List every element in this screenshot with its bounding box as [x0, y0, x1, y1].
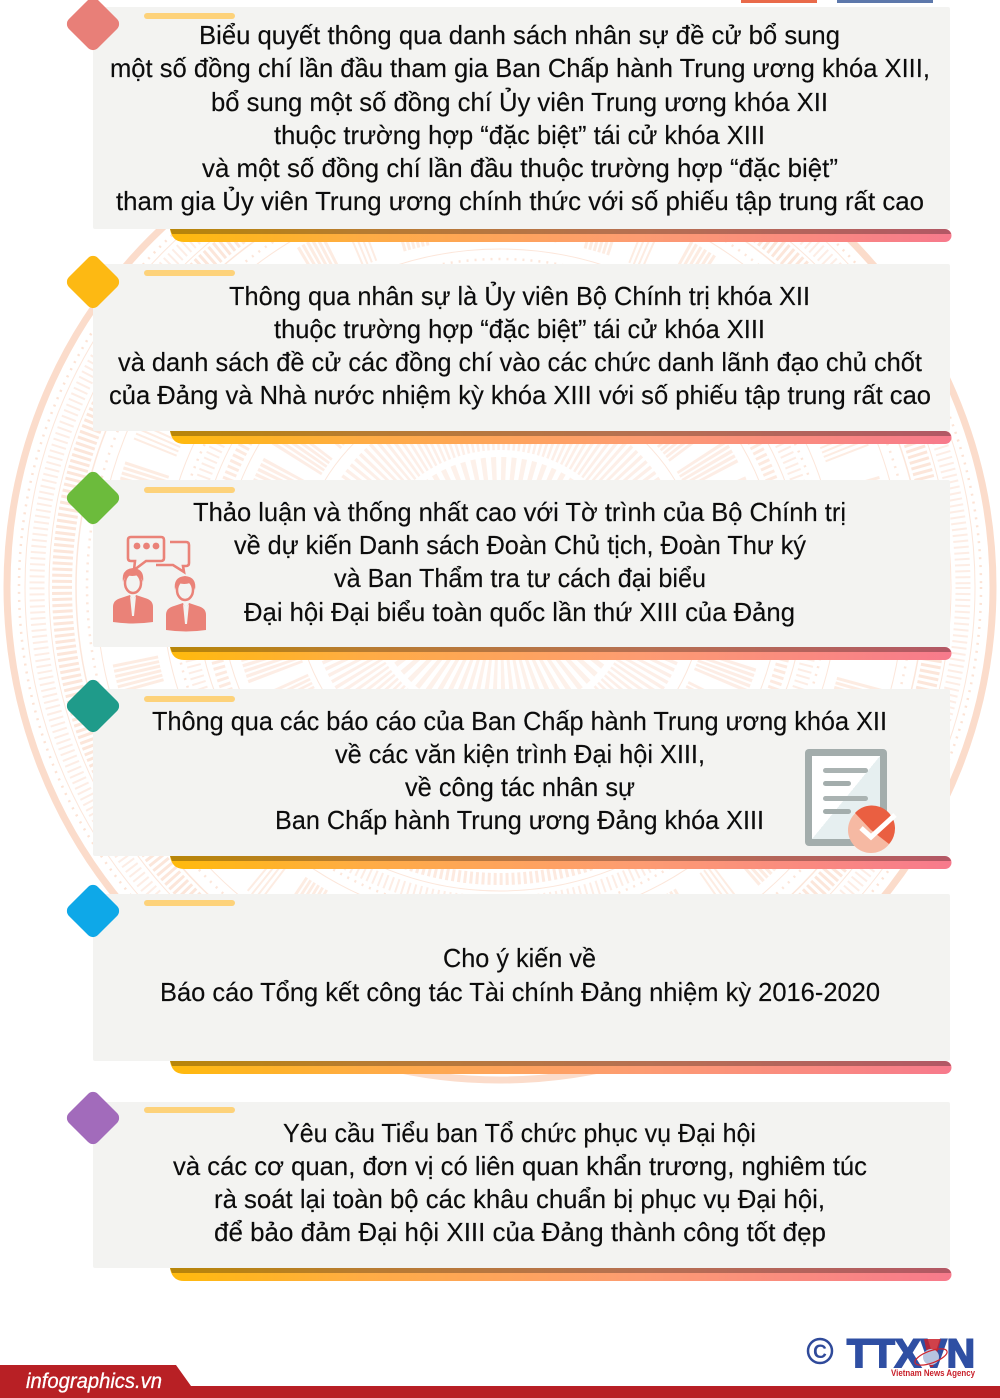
- text: panel 4: Thông qua các báo cáo của Ban Chấp hành Trung ương khóa XII: [152, 706, 887, 736]
- text: panel 5: Báo cáo Tổng kết công tác Tài chính Đảng nhiệm kỳ 2016-2020: [160, 977, 880, 1007]
- text: panel 1: bổ sung một số đồng chí Ủy viên Trung ương khóa XII: [211, 86, 828, 117]
- icon: yellow diamond marker: [64, 253, 122, 311]
- icon: teal diamond marker: [64, 677, 122, 735]
- text: panel 2: [109, 280, 931, 410]
- text: panel 3: Thảo luận và thống nhất cao với Tờ trình của Bộ Chính trị: [193, 497, 846, 527]
- text: panel 6: Yêu cầu Tiểu ban Tổ chức phục vụ Đại hội: [283, 1118, 756, 1148]
- text: panel 3: và Ban Thẩm tra tư cách đại biểu: [334, 563, 706, 593]
- text: panel 6: [173, 1118, 867, 1247]
- logo: TTXVN Vietnam News Agency: C: [813, 1342, 827, 1363]
- panel 2: Politburo personnel: [64, 253, 952, 444]
- text: panel 2: của Đảng và Nhà nước nhiệm kỳ khóa XIII với số phiếu tập trung rất cao: [109, 380, 931, 410]
- text: panel 1: và một số đồng chí lần đầu thuộc trường hợp “đặc biệt”: [202, 153, 838, 183]
- panel 3: Presidium discussion: [64, 469, 952, 660]
- text: panel 4: về các văn kiện trình Đại hội XIII,: [335, 739, 705, 769]
- text: panel 1: Biểu quyết thông qua danh sách nhân sự đề cử bổ sung: [199, 20, 840, 50]
- text: panel 6: và các cơ quan, đơn vị có liên quan khẩn trương, nghiêm túc: [173, 1151, 867, 1181]
- text: panel 4: về công tác nhân sự: [405, 772, 635, 802]
- icon: red diamond marker: [64, 0, 122, 53]
- text: panel 6: rà soát lại toàn bộ các khâu chuẩn bị phục vụ Đại hội,: [214, 1184, 825, 1214]
- footer bar with site name: infographics.vn: [26, 1370, 162, 1393]
- panel 1: voting on personnel list: [64, 0, 952, 242]
- text: panel 1: thuộc trường hợp “đặc biệt” tái cử khóa XIII: [274, 120, 765, 150]
- text: panel 4: [152, 706, 887, 835]
- text: panel 1: [110, 20, 930, 216]
- icon: document with check mark: [805, 749, 895, 853]
- text: panel 6: để bảo đảm Đại hội XIII của Đảng thành công tốt đẹp: [214, 1217, 826, 1247]
- text: panel 5: Cho ý kiến về: [443, 943, 596, 973]
- text: panel 2: Thông qua nhân sự là Ủy viên Bộ Chính trị khóa XII: [229, 280, 810, 311]
- panel 5: financial report: [64, 882, 952, 1074]
- icon: two people talking: [113, 537, 206, 632]
- panel 4: reports approval: [64, 677, 952, 869]
- text: panel 2: và danh sách đề cử các đồng chí vào các chức danh lãnh đạo chủ chốt: [118, 347, 923, 377]
- icon: green diamond marker: [64, 469, 122, 527]
- text: panel 3: về dự kiến Danh sách Đoàn Chủ tịch, Đoàn Thư ký: [234, 530, 806, 560]
- text: panel 3: [193, 497, 846, 627]
- text: panel 5: [160, 943, 880, 1007]
- text: panel 1: tham gia Ủy viên Trung ương chính thức với số phiếu tập trung rất cao: [116, 185, 924, 216]
- logo: TTXVN Vietnam News Agency: TTXVN: [847, 1332, 975, 1376]
- logo: TTXVN Vietnam News Agency: Vietnam News Agency: [891, 1368, 975, 1378]
- background: bronze drum emblem: [7, 94, 993, 1080]
- footer bar with site name: [0, 1365, 1000, 1398]
- text: panel 4: Ban Chấp hành Trung ương Đảng khóa XIII: [275, 805, 764, 835]
- icon: purple diamond marker: [64, 1089, 122, 1147]
- icon: blue diamond marker: [64, 882, 122, 940]
- text: panel 3: Đại hội Đại biểu toàn quốc lần thứ XIII của Đảng: [244, 597, 795, 627]
- text: panel 1: một số đồng chí lần đầu tham gia Ban Chấp hành Trung ương khóa XIII,: [110, 53, 930, 83]
- text: panel 2: thuộc trường hợp “đặc biệt” tái cử khóa XIII: [274, 314, 765, 344]
- top edge fragments of previous section: [741, 0, 933, 3]
- panel 6: organising subcommittee: [64, 1089, 952, 1281]
